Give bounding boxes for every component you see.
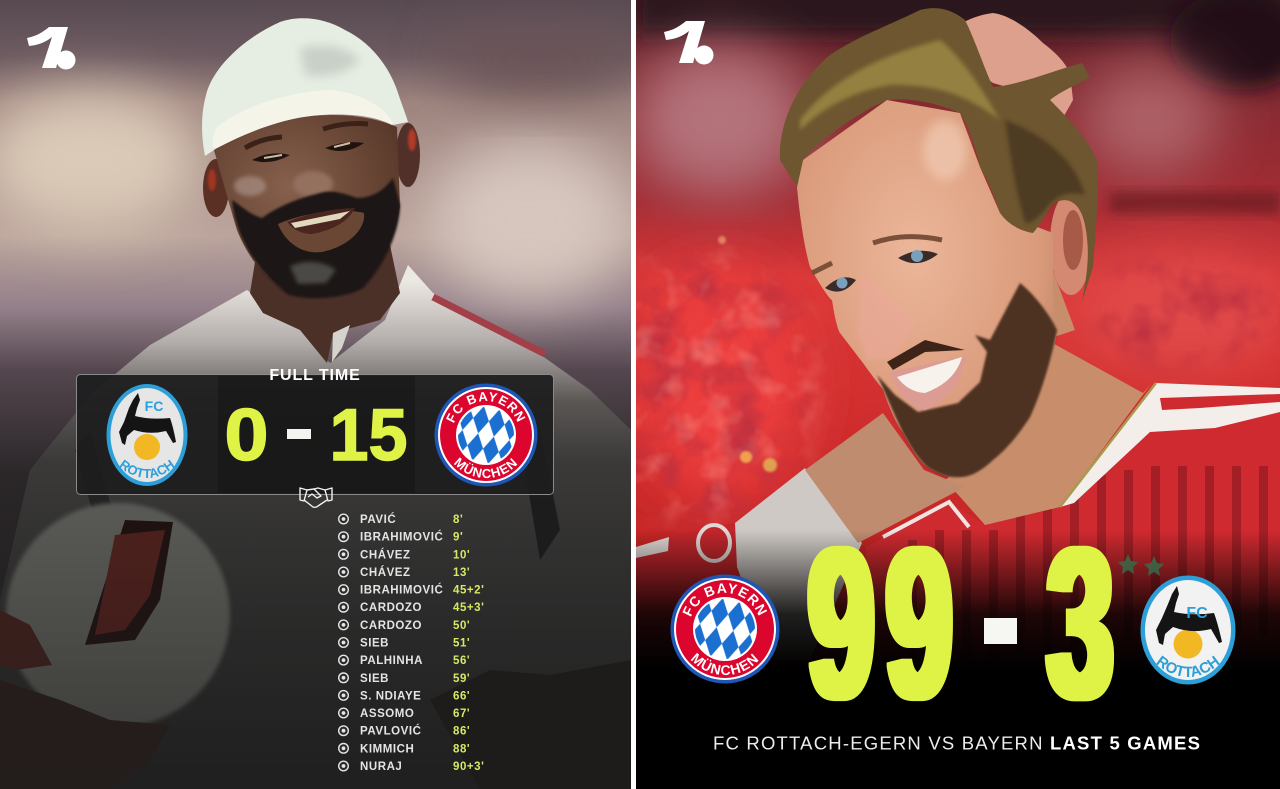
hands [0, 680, 170, 731]
crest: FC Bayern: FC BAYERN [446, 392, 526, 423]
score panel [76, 367, 554, 495]
goal minutes: 50' [453, 620, 470, 632]
scorer names: KIMMICH [360, 743, 414, 755]
goal minutes: 45+2' [453, 585, 484, 597]
crest: FC Bayern [434, 384, 538, 486]
crest: FC Bayern large: MÜNCHEN [690, 652, 758, 676]
nose [860, 290, 904, 358]
score: 99 - 3 [808, 503, 1113, 743]
cap [202, 18, 408, 156]
goal minutes: 8' [453, 514, 463, 526]
jersey stars [1118, 554, 1164, 576]
mouth and teeth [287, 208, 355, 234]
jersey [866, 505, 1280, 562]
scorer names: IBRAHIMOVIĆ [360, 531, 443, 544]
score: 0 - 15: 0 [224, 395, 268, 476]
goal minutes: 59' [453, 673, 470, 685]
logo: left [27, 27, 76, 70]
hand on head [966, 13, 1073, 115]
goal minutes: 88' [453, 743, 470, 755]
goal scorers list [339, 513, 484, 773]
scorer names: SIEB [360, 638, 389, 650]
goal minutes: 45+3' [453, 602, 484, 614]
scorer names: PAVIĆ [360, 513, 396, 526]
scorer names: NURAJ [360, 761, 402, 773]
beard [232, 178, 400, 298]
ball [6, 503, 230, 727]
panel: right head to head [630, 0, 1280, 789]
scorer names [360, 513, 443, 773]
left sleeve [696, 523, 735, 540]
goal minutes: 51' [453, 638, 470, 650]
logo: right [664, 21, 714, 64]
goal minutes: 9' [453, 532, 463, 544]
collar and shoulder stripes [1060, 383, 1280, 507]
bottom fade to black [636, 530, 1280, 670]
neck [945, 340, 1150, 525]
crest: FC Rottach: FC [145, 398, 163, 414]
crest: FC Rottach large: FC [1186, 605, 1208, 622]
score: 0 - 15 [224, 395, 408, 476]
scorer names: CARDOZO [360, 620, 422, 632]
face [213, 115, 400, 295]
score: 99 - 3: 9 [808, 503, 874, 743]
flares and crowd background [636, 0, 1280, 656]
heading: full time: FULL TIME [269, 367, 361, 384]
scorer names: S. NDIAYE [360, 690, 421, 702]
hair [780, 8, 1098, 302]
beard [877, 283, 1057, 477]
arm band [735, 468, 862, 660]
coach figure [0, 18, 631, 789]
goal minutes: 66' [453, 690, 470, 702]
goal minutes: 90+3' [453, 761, 484, 773]
goal minutes: 10' [453, 549, 470, 561]
crest: FC Rottach [106, 384, 188, 486]
bottom shade [0, 551, 231, 788]
crest: FC Rottach: ROTTACH [120, 460, 174, 478]
caption: FC ROTTACH-EGERN VS BAYERN LAST 5 GAMES [713, 732, 1201, 754]
neck [250, 245, 400, 363]
scorer names: IBRAHIMOVIĆ [360, 584, 443, 597]
crest: FC Rottach large: ROTTACH [1156, 656, 1220, 677]
icon: handshake [300, 488, 332, 507]
arm [805, 413, 965, 543]
ear [1053, 272, 1075, 336]
scorer names: CHÁVEZ [360, 566, 411, 579]
goal minutes: 67' [453, 708, 470, 720]
crest: FC Bayern: MÜNCHEN [454, 457, 518, 478]
scorer names: PALHINHA [360, 655, 423, 667]
crest: FC Rottach large [1140, 576, 1236, 684]
scorer names: PAVLOVIĆ [360, 725, 421, 738]
jacket [0, 265, 631, 664]
scorer names: SIEB [360, 673, 389, 685]
eyes [898, 251, 938, 263]
moustache [887, 340, 965, 370]
face [797, 100, 1057, 477]
goal minutes [453, 514, 484, 773]
mouth and teeth [890, 356, 966, 410]
score: 99 - 3: 3 [1047, 503, 1113, 743]
eyes [252, 153, 290, 162]
crest: FC Bayern large: FC BAYERN [682, 583, 768, 616]
goal minutes: 13' [453, 567, 470, 579]
ears [203, 159, 229, 217]
panel: left match result [0, 0, 640, 789]
player figure [636, 8, 1280, 652]
scorer names: CARDOZO [360, 602, 422, 614]
score: 99 - 3: 9 [886, 503, 952, 743]
goal minutes: 86' [453, 726, 470, 738]
score: 0 - 15: 15 [330, 395, 408, 476]
goal minutes: 56' [453, 655, 470, 667]
crest: FC Bayern large [670, 574, 780, 684]
blurred stadium background [0, 0, 631, 600]
scorer names: ASSOMO [360, 708, 414, 720]
goal icons [339, 514, 348, 771]
scorer names: CHÁVEZ [360, 548, 411, 561]
